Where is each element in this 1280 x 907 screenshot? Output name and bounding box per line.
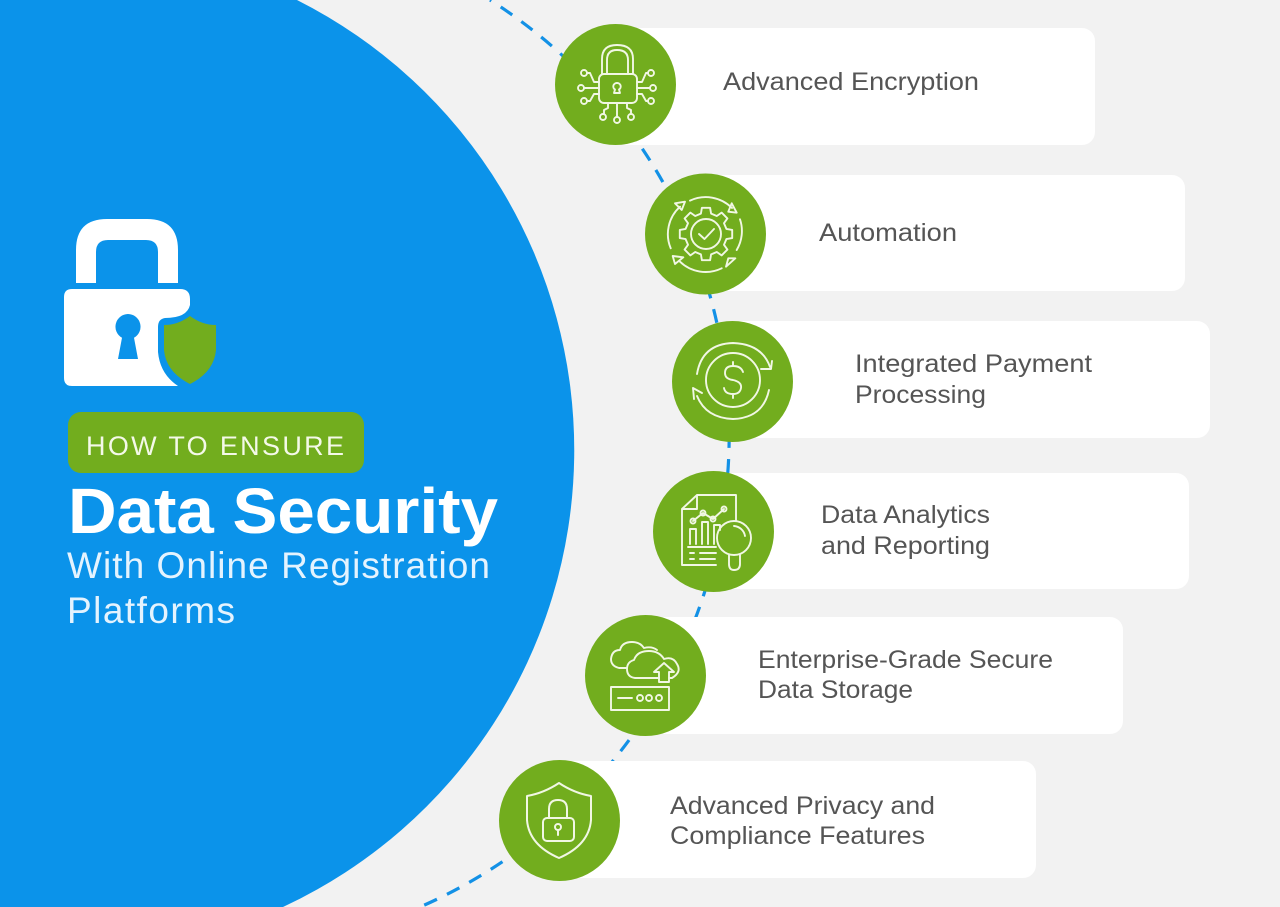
panel: integrated payment processing xyxy=(672,321,1210,442)
icon: shield with lock xyxy=(527,783,591,858)
subtitle: With Online Registration xyxy=(67,545,490,586)
panel: enterprise-grade secure data storage xyxy=(585,615,1123,736)
label xyxy=(670,792,935,850)
badge circle xyxy=(555,24,676,145)
label: Compliance Features xyxy=(670,822,925,850)
card xyxy=(705,175,1185,291)
badge: how to ensure: HOW TO ENSURE xyxy=(86,431,344,461)
icon: circuit lock xyxy=(578,45,656,123)
subtitle: Platforms xyxy=(67,590,235,631)
label: Integrated Payment xyxy=(855,350,1092,378)
badge circle xyxy=(672,321,793,442)
card xyxy=(556,761,1036,878)
badge circle xyxy=(645,174,766,294)
label: and Reporting xyxy=(821,532,990,560)
label: Data Storage xyxy=(758,676,913,704)
icon: padlock with shield xyxy=(64,219,216,386)
panel: data analytics and reporting xyxy=(653,471,1189,592)
card xyxy=(643,617,1123,734)
label xyxy=(821,501,990,560)
dashed connector arc xyxy=(420,0,729,907)
badge circle xyxy=(585,615,706,736)
card xyxy=(730,321,1210,438)
icon: payment cycle xyxy=(693,343,772,419)
label: Automation xyxy=(819,219,957,247)
label xyxy=(855,350,1092,409)
label: Processing xyxy=(855,381,986,409)
card xyxy=(615,28,1095,145)
card xyxy=(710,473,1189,589)
badge circle xyxy=(653,471,774,592)
blue semicircle panel xyxy=(0,0,574,907)
label: Advanced Privacy and xyxy=(670,792,935,820)
panel: advanced privacy and compliance features xyxy=(499,760,1036,881)
panel: automation xyxy=(645,174,1185,294)
label: Data Analytics xyxy=(821,501,990,529)
badge circle xyxy=(499,760,620,881)
label xyxy=(758,646,1053,704)
icon: report with magnifier xyxy=(682,495,751,570)
label: Enterprise-Grade Secure xyxy=(758,646,1053,674)
label: Advanced Encryption xyxy=(723,68,979,96)
icon: cloud storage xyxy=(611,642,679,710)
badge: how to ensure xyxy=(68,412,364,473)
panel: advanced encryption xyxy=(555,24,1095,145)
icon: gear with arrows xyxy=(668,197,742,272)
title: Data Security xyxy=(68,475,498,547)
subtitle xyxy=(67,545,490,631)
